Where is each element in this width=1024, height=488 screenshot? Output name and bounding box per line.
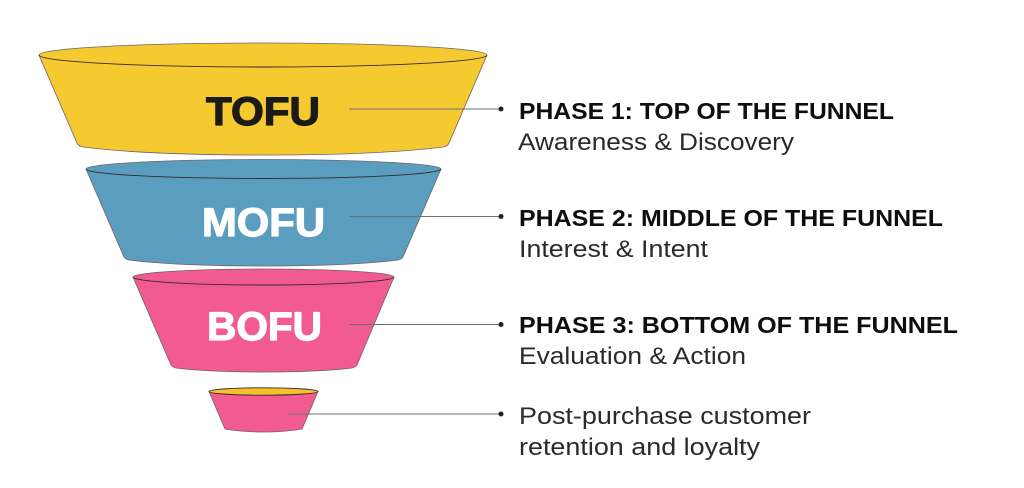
text block: post-purchase retention: Post-purchase customer [519, 403, 811, 430]
connector: BOFU to phase 3 [349, 322, 504, 327]
connector: TOFU to phase 1 [349, 106, 504, 112]
funnel tier: TOFU [39, 43, 487, 155]
text block: phase 3: Evaluation & Action [519, 343, 746, 370]
text block: post-purchase retention [519, 403, 811, 461]
text block: phase 1 [518, 98, 894, 156]
text block: phase 2: PHASE 2: MIDDLE OF THE FUNNEL [519, 205, 943, 231]
text block: post-purchase retention: retention and loyalty [519, 434, 761, 461]
connector: MOFU to phase 2 [349, 214, 504, 219]
funnel tier: post-purchase [209, 388, 318, 432]
connector: post-purchase to retention text [288, 412, 504, 416]
funnel tier: MOFU [86, 160, 441, 266]
text block: phase 3: PHASE 3: BOTTOM OF THE FUNNEL [519, 312, 958, 338]
text block: phase 1: Awareness & Discovery [518, 129, 795, 156]
funnel tier: BOFU [133, 269, 394, 372]
text block: phase 1: PHASE 1: TOP OF THE FUNNEL [519, 98, 894, 124]
text block: phase 2 [519, 205, 943, 263]
text block: phase 3 [519, 312, 958, 370]
text block: phase 2: Interest & Intent [519, 236, 708, 263]
label: MOFU: MOFU [202, 201, 325, 245]
label: TOFU: TOFU [206, 90, 320, 134]
label: BOFU: BOFU [207, 305, 322, 349]
